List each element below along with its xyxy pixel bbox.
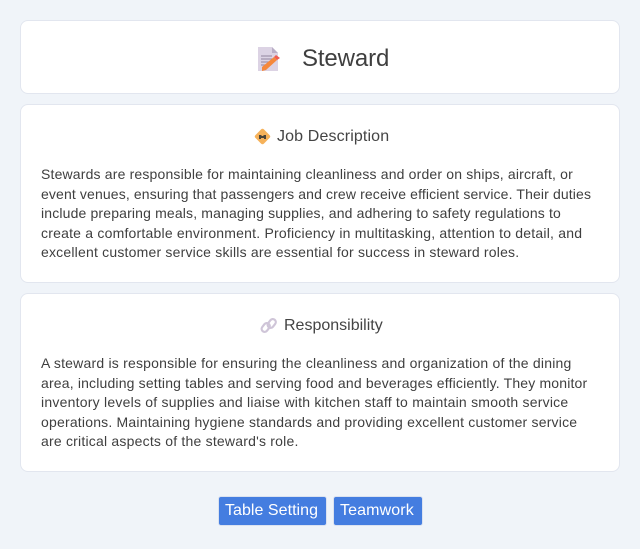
tag: teamwork bbox=[333, 496, 423, 526]
icon: chain link bbox=[260, 318, 277, 333]
text block: job description: Stewards are responsible for maintaining cleanliness and order on ships, aircraft, or bbox=[41, 166, 573, 182]
tag: teamwork: Teamwork bbox=[340, 502, 414, 519]
tag: table setting bbox=[218, 496, 327, 526]
text block: responsibility: are critical aspects of the steward's role. bbox=[41, 433, 299, 449]
title: Steward bbox=[302, 45, 389, 72]
icon: diamond sign bbox=[254, 128, 270, 144]
text block: responsibility: operations. Maintaining hygiene standards and providing excellent customer service bbox=[41, 414, 577, 430]
icon: document with pencil bbox=[258, 47, 280, 71]
tag: table setting: Table Setting bbox=[225, 502, 318, 519]
text block: responsibility bbox=[41, 355, 587, 449]
text block: responsibility: area, including setting tables and serving food and beverages efficiently. They monitor bbox=[41, 374, 587, 390]
text block: job description: create a comfortable environment. Proficiency in multitasking, attention to detail, and bbox=[41, 224, 582, 240]
text block: job description bbox=[41, 166, 591, 260]
text block: responsibility: inventory levels of supplies and liaise with kitchen staff to maintain smooth service bbox=[41, 394, 568, 410]
panel: job description bbox=[20, 104, 620, 283]
heading: responsibility: Responsibility bbox=[284, 317, 383, 334]
panel: title card bbox=[20, 20, 620, 94]
text block: job description: event venues, ensuring that passengers and crew receive efficient service. Their duties bbox=[41, 186, 591, 202]
text block: job description: include preparing meals, managing supplies, and adhering to safety regulations to bbox=[41, 205, 561, 221]
text block: job description: excellent customer service skills are essential for success in steward roles. bbox=[41, 244, 519, 260]
text block: responsibility: A steward is responsible for ensuring the cleanliness and organization of the dining bbox=[41, 355, 572, 371]
heading: job description: Job Description bbox=[277, 128, 389, 145]
panel: responsibility bbox=[20, 293, 620, 472]
